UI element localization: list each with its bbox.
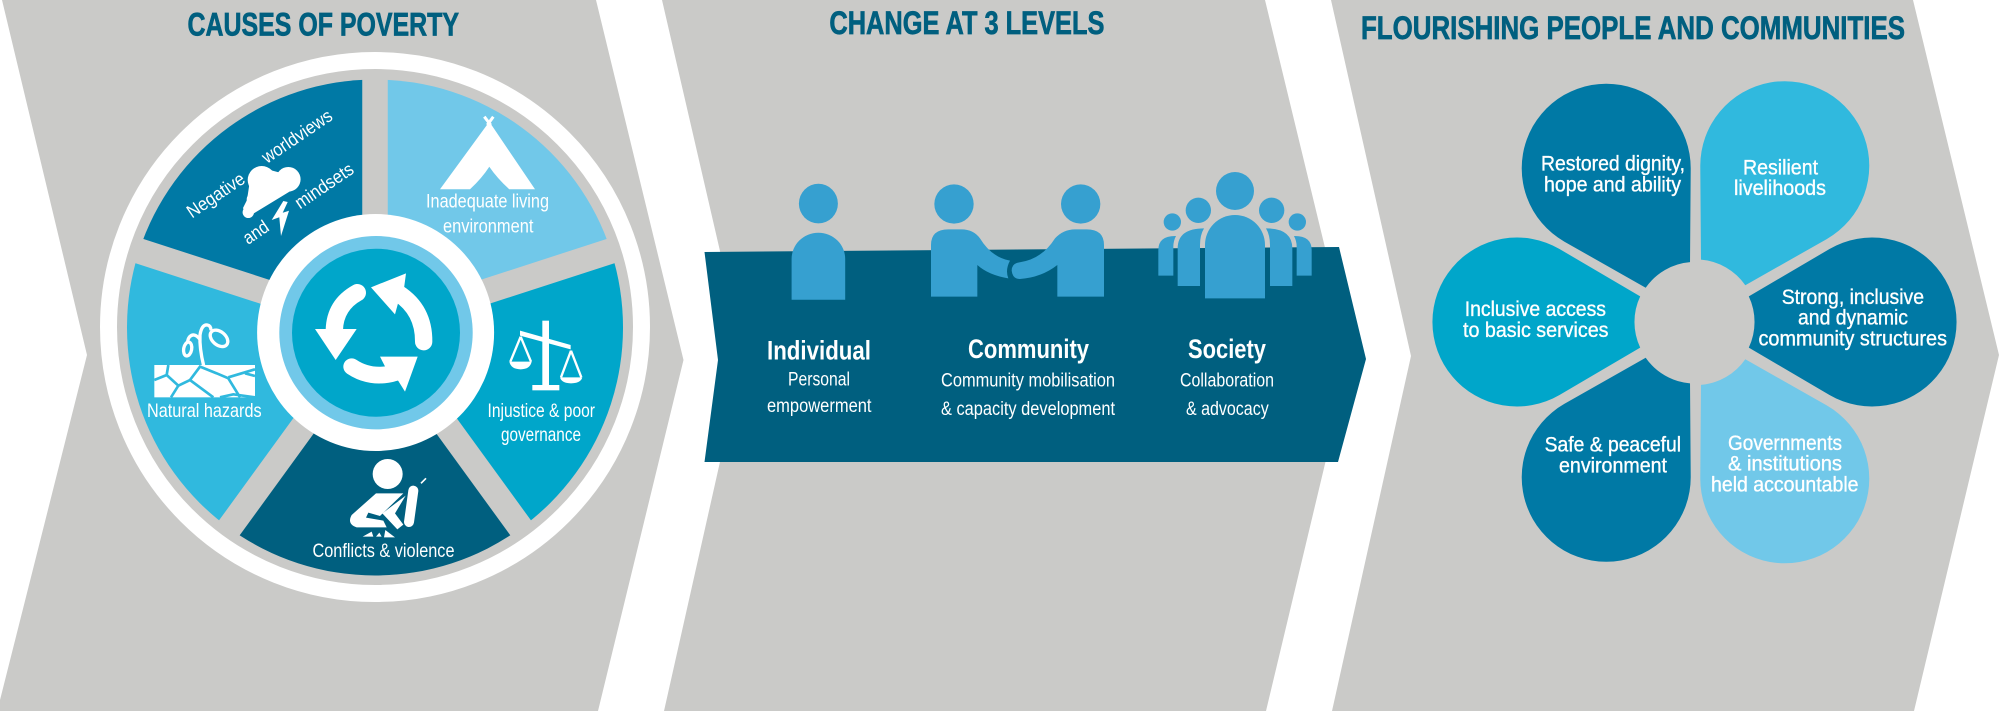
icon: group of people bbox=[1158, 172, 1312, 298]
heading: causes of poverty: CAUSES OF POVERTY bbox=[188, 6, 459, 42]
icon: person with weapon bbox=[350, 459, 426, 537]
label: strong community structures: and dynamic bbox=[1798, 306, 1908, 330]
label: negative worldviews and mindsets: mindsets bbox=[290, 158, 357, 213]
segment: negative worldviews and mindsets bbox=[139, 80, 375, 328]
panel: change at 3 levels bbox=[662, 0, 1366, 711]
icon: storm cloud bbox=[243, 166, 301, 236]
label: strong community structures bbox=[1758, 285, 1947, 351]
text block: individual: Personal bbox=[788, 370, 850, 390]
label: inclusive access: Inclusive access bbox=[1465, 297, 1606, 321]
heading: change at 3 levels: CHANGE AT 3 LEVELS bbox=[829, 5, 1104, 41]
label: inadequate living environment: environment bbox=[443, 216, 534, 238]
text block: individual: empowerment bbox=[767, 396, 872, 417]
icon: scales of justice bbox=[509, 321, 582, 390]
text block: society: & advocacy bbox=[1186, 399, 1269, 420]
label: safe and peaceful: environment bbox=[1559, 454, 1667, 478]
label: inadequate living environment bbox=[426, 191, 549, 238]
text block: community bbox=[941, 334, 1116, 420]
text block: individual: Individual bbox=[767, 336, 871, 366]
label: governments held accountable: held accountable bbox=[1711, 473, 1858, 497]
label: negative worldviews and mindsets bbox=[182, 105, 357, 248]
icon: individual bbox=[792, 184, 845, 300]
segment: natural hazards bbox=[127, 251, 375, 528]
label: governments held accountable: Governments bbox=[1728, 431, 1842, 455]
label: governments held accountable bbox=[1711, 431, 1858, 497]
hub teal disc bbox=[292, 249, 460, 417]
segment: conflicts and violence bbox=[229, 328, 521, 575]
label: resilient livelihoods: Resilient bbox=[1743, 156, 1818, 180]
icon: handshake bbox=[931, 184, 1104, 297]
label: natural hazards: Natural hazards bbox=[147, 400, 262, 422]
label: inadequate living environment: Inadequate living bbox=[426, 191, 549, 213]
wheel diagram bbox=[108, 60, 642, 594]
label: injustice and poor governance bbox=[488, 400, 595, 446]
label: inclusive access bbox=[1463, 297, 1608, 342]
text block: community: & capacity development bbox=[941, 399, 1116, 420]
petal: inclusive access bbox=[1432, 238, 1640, 406]
label: resilient livelihoods bbox=[1734, 156, 1826, 200]
icon: tent bbox=[440, 117, 535, 189]
text block: community: Community bbox=[968, 334, 1089, 364]
petal: governments held accountable bbox=[1650, 330, 1900, 594]
label: safe and peaceful: Safe & peaceful bbox=[1545, 433, 1681, 457]
label: restored dignity: Restored dignity, bbox=[1541, 152, 1685, 176]
label: injustice and poor governance: Injustice & poor bbox=[488, 400, 595, 422]
text block: society: Society bbox=[1188, 334, 1266, 364]
label: governments held accountable: & institutions bbox=[1728, 452, 1842, 476]
label: negative worldviews and mindsets: worldviews bbox=[257, 105, 336, 168]
label: strong community structures: Strong, inclusive bbox=[1782, 285, 1924, 309]
text block: individual bbox=[767, 336, 872, 417]
label: safe and peaceful bbox=[1545, 433, 1681, 478]
segment: injustice and poor governance bbox=[375, 251, 623, 528]
wheel outer ring bbox=[108, 60, 642, 594]
petal: restored dignity bbox=[1491, 53, 1741, 317]
label: negative worldviews and mindsets: and bbox=[238, 216, 273, 248]
text block: society: Collaboration bbox=[1180, 370, 1274, 391]
text block: community: Community mobilisation bbox=[941, 370, 1115, 391]
label: injustice and poor governance: governance bbox=[501, 424, 581, 446]
panel: causes of poverty bbox=[0, 0, 684, 711]
hub white circle bbox=[257, 214, 494, 451]
label: restored dignity: hope and ability bbox=[1544, 172, 1681, 196]
petal: strong community structures bbox=[1749, 238, 1957, 406]
label: restored dignity bbox=[1541, 152, 1685, 196]
hub light ring bbox=[279, 236, 473, 429]
label: negative worldviews and mindsets: Negative bbox=[182, 168, 249, 222]
text block: society bbox=[1180, 334, 1274, 420]
flower diagram bbox=[1432, 50, 1957, 594]
icon: cracked ground and wilting plant bbox=[154, 325, 255, 397]
label: conflicts and violence: Conflicts & violence bbox=[312, 540, 454, 562]
petal: resilient livelihoods bbox=[1650, 50, 1900, 315]
chevron background: change bbox=[662, 0, 1351, 711]
chevron background: flourishing bbox=[1331, 0, 1999, 711]
label: inclusive access: to basic services bbox=[1463, 318, 1608, 342]
arrow band bbox=[704, 247, 1366, 462]
label: strong community structures: community structures bbox=[1758, 327, 1947, 351]
chevron background: causes bbox=[0, 0, 684, 711]
icon: cycle arrows bbox=[315, 273, 424, 392]
petal: safe and peaceful bbox=[1491, 328, 1741, 593]
panel: flourishing people and communities bbox=[1331, 0, 1999, 711]
label: resilient livelihoods: livelihoods bbox=[1734, 176, 1826, 200]
segment: inadequate living environment bbox=[375, 80, 611, 328]
